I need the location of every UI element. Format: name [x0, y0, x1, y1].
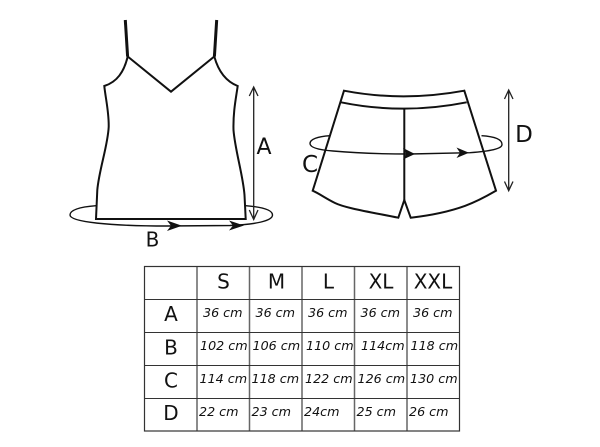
shorts outline	[313, 91, 496, 218]
row C: 122 cm	[305, 371, 353, 386]
label C: C	[302, 152, 318, 178]
row D: 23 cm	[252, 404, 291, 419]
waistband line	[341, 102, 467, 109]
header row: M	[268, 270, 285, 294]
camisole top diagram	[70, 20, 272, 226]
row A: 36 cm	[360, 305, 400, 320]
size table	[144, 266, 460, 431]
table grid	[144, 266, 460, 431]
header row: XXL	[414, 270, 453, 294]
arrowheads on measure C	[403, 148, 469, 160]
row D: 26 cm	[409, 404, 449, 419]
row D: 22 cm	[199, 404, 239, 419]
row B: B	[164, 336, 178, 360]
row B: 114cm	[361, 338, 405, 353]
row D: D	[163, 401, 179, 425]
row A: 36 cm	[308, 305, 348, 320]
row C: C	[164, 368, 178, 392]
shorts diagram	[310, 91, 502, 218]
row B: 106 cm	[252, 338, 300, 353]
row B	[164, 336, 458, 360]
row D	[163, 401, 449, 425]
header row	[217, 270, 453, 294]
row A: A	[164, 302, 178, 326]
row D: 25 cm	[356, 404, 396, 419]
row A	[164, 302, 453, 326]
label D: D	[515, 122, 533, 148]
arrow D	[504, 90, 513, 191]
row A: 36 cm	[203, 305, 243, 320]
measure C loop	[310, 136, 502, 154]
row C: 130 cm	[410, 371, 458, 386]
measure B loop	[70, 206, 272, 226]
arrowheads on measure B	[167, 220, 244, 231]
arrow A	[249, 87, 258, 220]
left strap	[125, 20, 128, 56]
right strap	[214, 20, 217, 56]
row D: 24cm	[304, 404, 339, 419]
centre seam	[403, 109, 405, 200]
row C: 114 cm	[200, 371, 247, 386]
row B: 110 cm	[306, 338, 354, 353]
row C	[164, 368, 458, 392]
row A: 36 cm	[256, 305, 295, 320]
row B: 118 cm	[410, 338, 458, 353]
row A: 36 cm	[413, 305, 453, 320]
label A: A	[256, 135, 272, 160]
label B: B	[146, 228, 159, 252]
row C: 118 cm	[252, 371, 299, 386]
header row: L	[323, 270, 335, 294]
row C: 126 cm	[358, 371, 405, 386]
header row: XL	[369, 270, 394, 294]
row B: 102 cm	[200, 338, 248, 353]
camisole outline	[96, 56, 246, 219]
header row: S	[217, 270, 230, 294]
